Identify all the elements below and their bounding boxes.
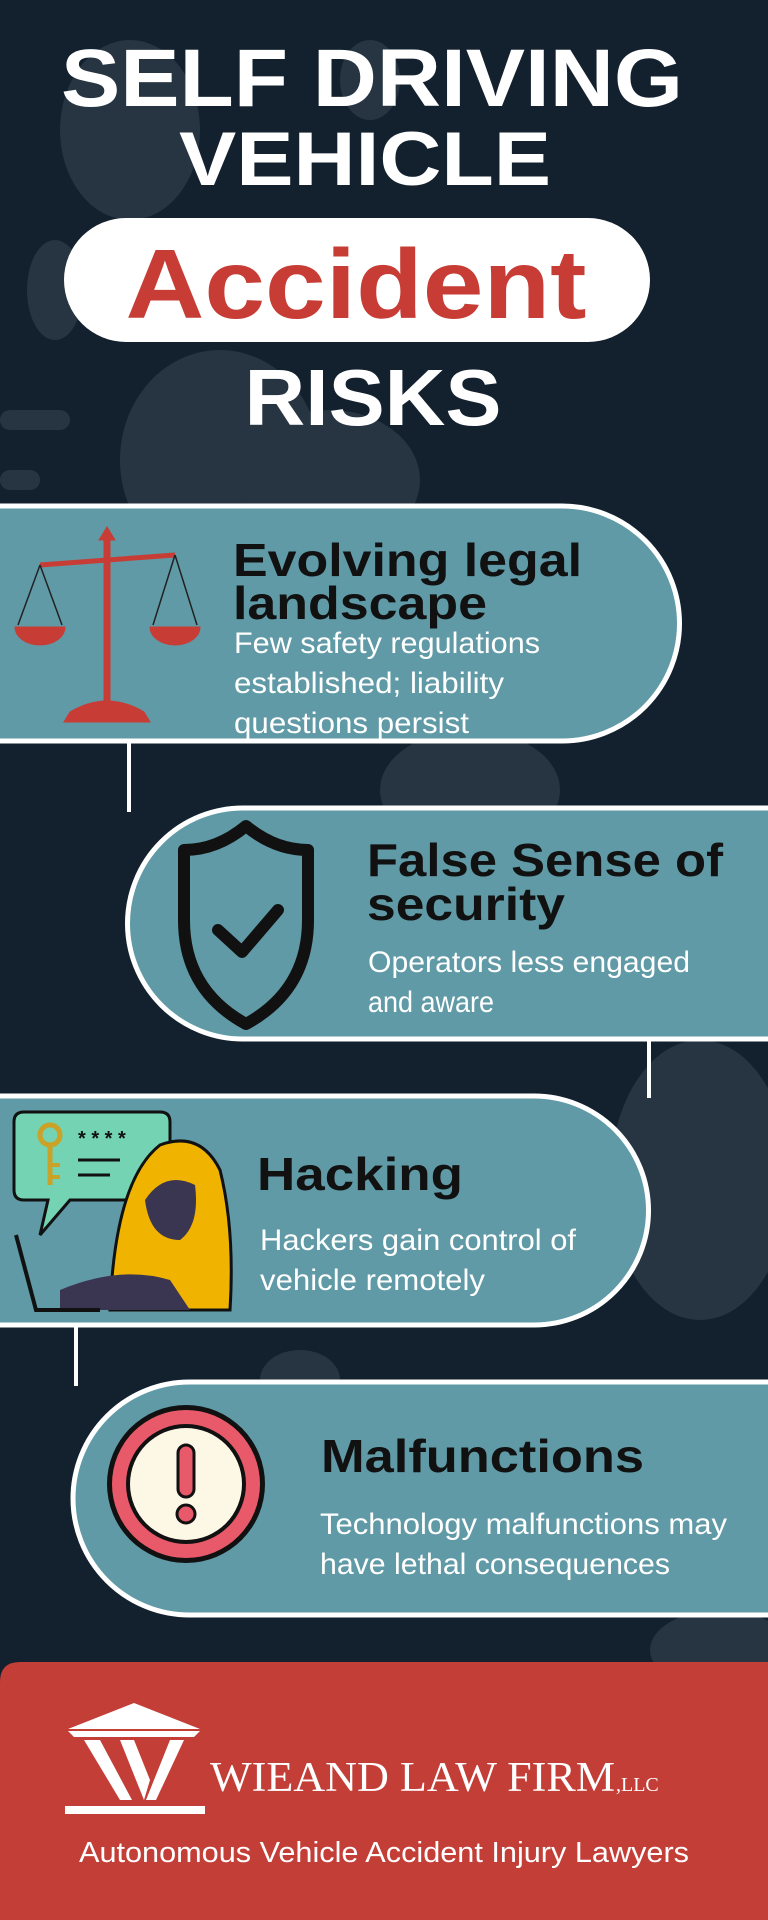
panel: false sense of security: False Sense of [367, 834, 724, 886]
footer: WIEAND LAW FIRM [210, 1755, 615, 1801]
panel: malfunctions [73, 1382, 768, 1615]
icon: shield [184, 826, 308, 1024]
panel: evolving legal landscape [0, 506, 680, 741]
footer [0, 1662, 768, 1920]
panel: hacking: vehicle remotely [260, 1264, 485, 1297]
body text: Few safety regulations [234, 627, 540, 660]
panel: malfunctions: have lethal consequences [320, 1548, 670, 1581]
panel: false sense of security [128, 808, 768, 1039]
pill: Accident [64, 218, 650, 342]
title [61, 33, 683, 442]
panel: false sense of security: Operators less engaged [368, 946, 690, 979]
icon: hacker [14, 1112, 231, 1310]
title: RISKS [244, 353, 502, 442]
icon: scale [15, 527, 200, 722]
panel: hacking: Hackers gain control of [260, 1224, 577, 1257]
panel: hacking: Hacking [257, 1148, 463, 1200]
body text [234, 627, 540, 740]
pill: Accident: Accident [126, 229, 586, 339]
footer: ,LLC [616, 1774, 659, 1796]
icon: alert [107, 1405, 265, 1563]
panel: malfunctions: Malfunctions [321, 1430, 644, 1482]
heading: Evolving legal [233, 534, 582, 586]
panel: evolving legal landscape: landscape [233, 577, 487, 629]
title: SELF DRIVING [61, 33, 683, 124]
panel: false sense of security: security [367, 878, 565, 930]
body text: questions persist [234, 707, 470, 740]
connectors [76, 741, 649, 1386]
footer: Autonomous Vehicle Accident Injury Lawyers [79, 1837, 689, 1869]
logo [65, 1703, 205, 1814]
body text: established; liability [234, 667, 504, 700]
title: VEHICLE [179, 117, 551, 202]
panel: malfunctions: Technology malfunctions may [320, 1508, 727, 1541]
panel: hacking [0, 1096, 648, 1325]
icon: hacker: * * * * [78, 1128, 126, 1150]
panel: false sense of security: and aware [368, 986, 494, 1019]
